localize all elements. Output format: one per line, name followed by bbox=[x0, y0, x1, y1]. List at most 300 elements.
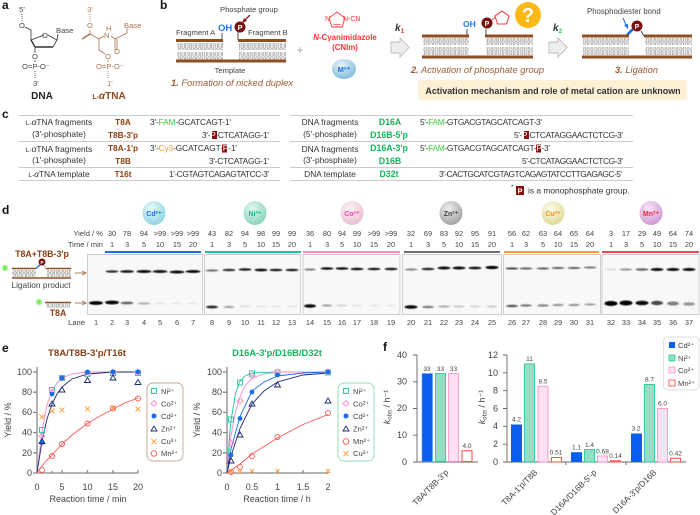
legend f: Cd²⁺ bbox=[678, 341, 694, 350]
bar chart: other ligations: 2 bbox=[493, 439, 498, 449]
yield row: 17 bbox=[622, 229, 630, 238]
k2 arrow: k bbox=[553, 23, 559, 34]
bar chart: other ligations: 0 bbox=[493, 457, 498, 467]
metal colour bars bbox=[105, 251, 699, 253]
label e: e bbox=[2, 341, 9, 355]
time row: 5 bbox=[541, 240, 545, 249]
time row: 10 bbox=[653, 240, 661, 249]
time row: 15 bbox=[370, 240, 378, 249]
time row: 5 bbox=[243, 240, 247, 249]
bar chart: other ligations: 8.7 bbox=[645, 376, 654, 384]
yield row: 98 bbox=[257, 229, 265, 238]
left table: L-aTNA sequences: (3'-phosphate) bbox=[32, 129, 86, 139]
DNA structure: 5' bbox=[19, 5, 25, 14]
right table: DNA sequences: (5'-phosphate) bbox=[303, 129, 357, 139]
L-aTNA structure: O=P-O⁻ bbox=[96, 62, 124, 71]
bar chart: other ligations: / h⁻¹ bbox=[477, 390, 487, 410]
ligation product schematic bbox=[2, 249, 71, 290]
chart: D16A-3'p/D16B/D32t: 40 bbox=[212, 428, 222, 438]
legend left: Cd²⁺ bbox=[161, 412, 177, 421]
step 1 nicked duplex bbox=[171, 5, 293, 88]
right table: DNA sequences: D16B bbox=[379, 156, 401, 166]
bar chart: other ligations bbox=[477, 350, 686, 515]
left table: L-aTNA sequences: T16t bbox=[114, 169, 132, 179]
yield row: 94 bbox=[241, 229, 249, 238]
ligation product schematic: T8A+T8B-3'p bbox=[15, 249, 69, 259]
yield row: 82 bbox=[225, 229, 233, 238]
lane numbers: 9 bbox=[227, 318, 231, 327]
legend right: Cd²⁺ bbox=[353, 412, 369, 421]
footnote: P bbox=[517, 186, 523, 196]
L-aTNA structure: O bbox=[87, 21, 93, 30]
legend right: Ni²⁺ bbox=[353, 387, 367, 396]
step 1 nicked duplex: Template bbox=[215, 66, 245, 75]
arrow to T8A band bbox=[75, 301, 86, 305]
bar chart: other ligations: 0.51 bbox=[550, 450, 563, 456]
right table: DNA sequences: DNA template bbox=[304, 169, 356, 179]
right table: DNA sequences: D16A bbox=[379, 117, 402, 127]
time row: 3 bbox=[624, 240, 628, 249]
panel a: structures bbox=[2, 0, 141, 102]
legend f: Co²⁺ bbox=[678, 366, 694, 375]
chart: T8A/T8B-3'p/T16t: 10 bbox=[82, 482, 93, 492]
lane numbers: 26 bbox=[508, 318, 516, 327]
bar chart: other ligations: 0.68 bbox=[596, 448, 609, 456]
chart: T8A/T8B-3'p/T16t: Reaction time / min bbox=[49, 494, 127, 504]
chart: D16A-3'p/D16B/D32t: 2 bbox=[325, 482, 331, 492]
lane numbers: 33 bbox=[622, 318, 630, 327]
lane numbers: 11 bbox=[257, 318, 265, 327]
yield row: >99 bbox=[171, 229, 183, 238]
bar chart: T8A/T8B-3'p: T8A/T8B-3'p bbox=[410, 467, 451, 507]
chart: T8A/T8B-3'p/T16t: 15 bbox=[108, 482, 118, 492]
step 1 nicked duplex: P bbox=[237, 23, 243, 32]
time row: 15 bbox=[173, 240, 181, 249]
bar chart: other ligations: 8.5 bbox=[538, 378, 548, 386]
lane numbers: 34 bbox=[638, 318, 646, 327]
yield row: 29 bbox=[638, 229, 646, 238]
lane numbers: 10 bbox=[241, 318, 249, 327]
lane numbers: 31 bbox=[586, 318, 594, 327]
left table: L-aTNA sequences: T8B-3'p bbox=[108, 130, 138, 140]
right table: DNA sequences: D32t bbox=[379, 169, 399, 179]
lane numbers: 30 bbox=[570, 318, 578, 327]
right table: DNA sequences: DNA fragments bbox=[302, 117, 358, 127]
lane numbers: 13 bbox=[288, 318, 296, 327]
DNA structure: O bbox=[19, 21, 25, 30]
time row bbox=[68, 240, 693, 249]
step 1 nicked duplex: Phosphate group bbox=[220, 5, 278, 14]
legend f bbox=[664, 337, 699, 390]
yield row: 64 bbox=[554, 229, 562, 238]
time row: 20 bbox=[288, 240, 296, 249]
left table: L-aTNA sequences: 3'-P-CTCATAGG-1' bbox=[202, 130, 269, 140]
chart: D16A-3'p/D16B/D32t: 0 bbox=[224, 482, 230, 492]
time row: 1 bbox=[510, 240, 514, 249]
legend right: Cu²⁺ bbox=[353, 449, 369, 458]
lane numbers: 14 bbox=[306, 318, 314, 327]
time row: 5 bbox=[442, 240, 446, 249]
label d: d bbox=[2, 203, 9, 217]
bar chart: other ligations: 4.2 bbox=[512, 416, 521, 424]
lane numbers: 18 bbox=[370, 318, 378, 327]
L-aTNA structure: 3' bbox=[87, 5, 93, 14]
DNA structure: O bbox=[32, 52, 38, 61]
DNA structure: O bbox=[42, 31, 48, 40]
yield row: 43 bbox=[208, 229, 216, 238]
bar chart: other ligations: 8 bbox=[493, 386, 498, 396]
time row: 3 bbox=[125, 240, 129, 249]
step 3 ligation bbox=[582, 7, 692, 75]
footnote: is a monophosphate group. bbox=[528, 186, 630, 196]
metal cation spheres: Co²⁺ bbox=[344, 211, 360, 218]
yield row: 92 bbox=[455, 229, 463, 238]
yield row: 99 bbox=[353, 229, 361, 238]
time row: 15 bbox=[669, 240, 677, 249]
right table: DNA sequences: 5'-FAM-GTGACGTAGCATCAGT-3' bbox=[420, 117, 542, 127]
time row: 20 bbox=[586, 240, 594, 249]
lane numbers: Lane bbox=[68, 318, 85, 327]
bar chart: other ligations: 10 bbox=[488, 368, 498, 378]
chart: D16A-3'p/D16B/D32t: 1.5 bbox=[297, 482, 309, 492]
lane numbers: 4 bbox=[142, 318, 146, 327]
yield row: 69 bbox=[424, 229, 432, 238]
time row: 10 bbox=[353, 240, 361, 249]
bar chart: other ligations: obs bbox=[482, 410, 488, 420]
DNA structure: Base bbox=[56, 26, 73, 35]
left table: L-aTNA sequences: L-αTNA template bbox=[28, 169, 90, 179]
time row: 10 bbox=[554, 240, 562, 249]
lane numbers: 6 bbox=[175, 318, 179, 327]
bar chart: T8A/T8B-3'p: 30 bbox=[397, 376, 407, 386]
panel c: sequence table bbox=[2, 107, 633, 196]
yield row: 83 bbox=[440, 229, 448, 238]
chart: D16A-3'p/D16B/D32t: 0 bbox=[217, 468, 222, 478]
chart: T8A/T8B-3'p/T16t: 80 bbox=[22, 387, 32, 397]
lane numbers: 5 bbox=[158, 318, 162, 327]
DNA structure bbox=[19, 5, 73, 102]
label c: c bbox=[2, 107, 9, 121]
chart: D16A-3'p/D16B/D32t: Reaction time / h bbox=[243, 494, 311, 504]
yield row: 65 bbox=[570, 229, 578, 238]
time row: 5 bbox=[142, 240, 146, 249]
yield row: 64 bbox=[669, 229, 677, 238]
step 2 activation: OH bbox=[463, 19, 476, 29]
time row: 1 bbox=[409, 240, 413, 249]
lane numbers: 8 bbox=[210, 318, 214, 327]
bar chart: other ligations: 1.1 bbox=[572, 444, 581, 452]
left table: L-aTNA sequences: 3'-CTCATAGG-1' bbox=[209, 156, 269, 166]
bar chart: other ligations: 0.42 bbox=[669, 450, 682, 458]
bar chart: T8A/T8B-3'p: k bbox=[382, 419, 392, 424]
lane numbers: 7 bbox=[191, 318, 195, 327]
bar chart: other ligations: 4 bbox=[493, 421, 498, 431]
bar chart: T8A/T8B-3'p: 4.0 bbox=[462, 443, 472, 450]
step 3 ligation: 3. Ligation bbox=[615, 65, 658, 75]
metal cation spheres: Cd²⁺ bbox=[146, 211, 162, 218]
yield row: 99 bbox=[272, 229, 280, 238]
T8A schematic bbox=[36, 299, 71, 318]
left table: L-aTNA sequences: 3'-Cy3-GCATCAGT-P-1' bbox=[150, 143, 237, 153]
yield row: 36 bbox=[306, 229, 314, 238]
left table: L-aTNA sequences: 1'-CGTAGTCAGAGTATCC-3' bbox=[169, 169, 269, 179]
chart: T8A/T8B-3'p/T16t: 20 bbox=[133, 482, 143, 492]
bar chart: T8A/T8B-3'p: 33 bbox=[423, 366, 431, 373]
chart: T8A/T8B-3'p/T16t: Yield / % bbox=[3, 402, 13, 438]
bar chart: T8A/T8B-3'p: 0 bbox=[402, 457, 407, 467]
step 3 ligation: P bbox=[635, 24, 640, 31]
yield row: 49 bbox=[653, 229, 661, 238]
lane numbers: 17 bbox=[353, 318, 361, 327]
chart: T8A/T8B-3'p/T16t: 5 bbox=[59, 482, 65, 492]
chart: T8A/T8B-3'p/T16t: 100 bbox=[17, 367, 32, 377]
legend left: Ni²⁺ bbox=[161, 387, 175, 396]
yield row: 95 bbox=[471, 229, 479, 238]
panel f: rate constants bbox=[382, 337, 699, 515]
yield row: 78 bbox=[123, 229, 131, 238]
yield row: 74 bbox=[685, 229, 693, 238]
bar chart: T8A/T8B-3'p bbox=[382, 350, 478, 507]
time row: 3 bbox=[227, 240, 231, 249]
chart: D16A-3'p/D16B/D32t: 20 bbox=[212, 448, 222, 458]
right table: DNA sequences bbox=[302, 117, 623, 179]
yield row: Yield / % bbox=[73, 229, 103, 238]
legend f: Mn²⁺ bbox=[678, 379, 695, 388]
yield row: 32 bbox=[407, 229, 415, 238]
time row: 10 bbox=[257, 240, 265, 249]
lane numbers: 2 bbox=[110, 318, 114, 327]
left table: L-aTNA sequences: 3'-FAM-GCATCAGT-1' bbox=[150, 117, 231, 127]
left table: L-aTNA sequences bbox=[26, 117, 269, 179]
metal cation sphere: M²⁺ bbox=[338, 65, 350, 74]
metal cation spheres: Mn²⁺ bbox=[643, 211, 659, 218]
ligation product schematic: Ligation product bbox=[11, 280, 71, 290]
k2 arrow: 2 bbox=[559, 28, 563, 35]
yield row: >99 bbox=[154, 229, 166, 238]
bar chart: T8A/T8B-3'p: 40 bbox=[397, 350, 407, 360]
L-aTNA structure: H bbox=[106, 24, 111, 33]
lane numbers: 35 bbox=[653, 318, 661, 327]
L-aTNA structure: N bbox=[104, 31, 109, 40]
lane numbers: 25 bbox=[488, 318, 496, 327]
L-aTNA structure: O bbox=[105, 52, 111, 61]
step 1 nicked duplex: OH bbox=[218, 23, 232, 34]
time row: 20 bbox=[387, 240, 395, 249]
yield row: 30 bbox=[108, 229, 116, 238]
left table: L-aTNA sequences: (1'-phosphate) bbox=[32, 155, 86, 165]
lane numbers: 1 bbox=[94, 318, 98, 327]
legend right bbox=[338, 383, 374, 461]
yield row: 94 bbox=[338, 229, 346, 238]
yield row: >99 bbox=[187, 229, 199, 238]
time row: 5 bbox=[640, 240, 644, 249]
bar chart: T8A/T8B-3'p: 10 bbox=[397, 430, 407, 440]
L-aTNA structure: Base bbox=[124, 21, 141, 30]
bar chart: other ligations: 3.2 bbox=[631, 426, 641, 432]
legend left bbox=[147, 383, 183, 461]
right table: DNA sequences: D16A-3'p bbox=[370, 143, 409, 153]
yield row: 94 bbox=[140, 229, 148, 238]
bar chart: other ligations: T8A-1'p/T8B bbox=[499, 467, 540, 507]
ligation product schematic: P bbox=[40, 260, 44, 265]
step 2 activation: P bbox=[485, 21, 490, 28]
label f: f bbox=[383, 340, 388, 354]
bar chart: T8A/T8B-3'p: 33 bbox=[437, 366, 444, 373]
time row: 20 bbox=[488, 240, 496, 249]
left table: L-aTNA sequences: L-αTNA fragments bbox=[26, 117, 92, 127]
chart: T8A/T8B-3'p/T16t bbox=[3, 348, 143, 504]
lane numbers: 24 bbox=[471, 318, 479, 327]
left table: L-aTNA sequences: T8A-1'p bbox=[108, 143, 138, 153]
chart: D16A-3'p/D16B/D32t: 60 bbox=[212, 407, 222, 417]
legend f: Ni²⁺ bbox=[678, 354, 692, 363]
legend left: Co²⁺ bbox=[161, 400, 177, 408]
legend right: Co²⁺ bbox=[353, 400, 369, 408]
time row: 20 bbox=[685, 240, 693, 249]
lane numbers: 36 bbox=[669, 318, 677, 327]
step 2 activation bbox=[410, 2, 544, 75]
time row: 20 bbox=[189, 240, 197, 249]
lane numbers: 29 bbox=[554, 318, 562, 327]
bar chart: other ligations: k bbox=[477, 419, 487, 424]
right table: DNA sequences: 5'-CTCATAGGAACTCTCG-3' bbox=[522, 156, 623, 166]
yield row: >99 bbox=[368, 229, 380, 238]
bar chart: other ligations: D16A-3'p/D16B bbox=[610, 467, 659, 515]
legend left: Mn²⁺ bbox=[161, 449, 178, 458]
time row: 1 bbox=[609, 240, 613, 249]
L-aTNA structure: O bbox=[114, 47, 120, 56]
yield row: 80 bbox=[323, 229, 331, 238]
yield row: 99 bbox=[288, 229, 296, 238]
k1 arrow: k bbox=[395, 23, 401, 34]
gel bands bbox=[89, 266, 696, 309]
gel frames bbox=[88, 254, 699, 314]
lane numbers: 21 bbox=[424, 318, 432, 327]
time row: 3 bbox=[524, 240, 528, 249]
L-aTNA structure: 1' bbox=[107, 79, 113, 88]
plus sign: + bbox=[296, 43, 304, 57]
bar chart: other ligations: 11 bbox=[526, 356, 533, 363]
L-aTNA structure bbox=[82, 5, 141, 102]
right table: DNA sequences: (3'-phosphate) bbox=[303, 155, 357, 165]
arrow to ligation product band bbox=[75, 271, 86, 275]
chart: T8A/T8B-3'p/T16t: 0 bbox=[34, 482, 40, 492]
legend right: Mn²⁺ bbox=[353, 437, 370, 446]
CNIm reagent: (CNIm) bbox=[332, 43, 358, 52]
k1 arrow: 1 bbox=[401, 28, 405, 35]
lane numbers: 22 bbox=[440, 318, 448, 327]
time row: 1 bbox=[110, 240, 114, 249]
step 1 nicked duplex: Fragment B bbox=[248, 28, 288, 37]
legend left: Zn²⁺ bbox=[161, 424, 176, 434]
metal cation spheres: Zn²⁺ bbox=[444, 211, 459, 218]
yield row: 62 bbox=[522, 229, 530, 238]
CNIm reagent bbox=[313, 12, 377, 52]
time row: 5 bbox=[340, 240, 344, 249]
left table: L-aTNA sequences: T8A bbox=[115, 117, 131, 127]
DNA structure: DNA bbox=[31, 91, 53, 102]
metal cation spheres: Cu²⁺ bbox=[545, 211, 561, 218]
time row: 3 bbox=[325, 240, 329, 249]
right table: DNA sequences: 3'-CACTGCATCGTAGTCAGAGTATCCTTGAGAGC-5' bbox=[439, 169, 622, 179]
bar chart: other ligations: 1.4 bbox=[585, 442, 594, 449]
yield row: 91 bbox=[488, 229, 496, 238]
CNIm reagent: N bbox=[325, 16, 330, 23]
yield row: 56 bbox=[508, 229, 516, 238]
bar chart: T8A/T8B-3'p: obs bbox=[388, 410, 394, 420]
CNIm reagent: N-Cyanimidazole bbox=[313, 33, 377, 42]
lane numbers: 16 bbox=[338, 318, 346, 327]
L-aTNA structure: L-αTNA bbox=[92, 91, 126, 102]
lane numbers bbox=[68, 318, 693, 327]
panel e: yield kinetics bbox=[2, 341, 374, 504]
bar chart: other ligations: 6.0 bbox=[658, 400, 667, 408]
lane numbers: 3 bbox=[125, 318, 129, 327]
yield row: 63 bbox=[539, 229, 547, 238]
lane numbers: 32 bbox=[607, 318, 615, 327]
k1 arrow bbox=[391, 23, 409, 57]
time row: 15 bbox=[570, 240, 578, 249]
lane numbers: 15 bbox=[323, 318, 331, 327]
legend right: Zn²⁺ bbox=[353, 424, 368, 434]
DNA structure: O=P-O⁻ bbox=[22, 62, 50, 71]
chart: D16A-3'p/D16B/D32t: D16A-3'p/D16B/D32t bbox=[232, 347, 322, 358]
left table: L-aTNA sequences: L-αTNA fragments bbox=[26, 144, 92, 154]
step 1 nicked duplex: Fragment A bbox=[176, 28, 216, 37]
lane numbers: 20 bbox=[407, 318, 415, 327]
yield row bbox=[73, 229, 693, 238]
chart: D16A-3'p/D16B/D32t: 0.5 bbox=[246, 482, 258, 492]
bar chart: T8A/T8B-3'p: / h⁻¹ bbox=[382, 390, 392, 410]
bar chart: other ligations: 0.14 bbox=[609, 453, 622, 460]
metal cation spheres: Ni²⁺ bbox=[248, 211, 262, 218]
bar chart: other ligations: 6 bbox=[493, 404, 498, 414]
chart: D16A-3'p/D16B/D32t: Yield / % bbox=[192, 402, 202, 438]
panel d: gel electrophoresis bbox=[2, 201, 699, 327]
panel b: ligation mechanism bbox=[160, 0, 692, 100]
callout: unknown mechanism: Activation mechanism and role of metal cation are unknown bbox=[425, 86, 681, 96]
lane numbers: 19 bbox=[387, 318, 395, 327]
right table: DNA sequences: D16B-5'p bbox=[370, 130, 409, 140]
right table: DNA sequences: DNA fragments bbox=[302, 144, 358, 154]
time row: 15 bbox=[272, 240, 280, 249]
chart: T8A/T8B-3'p/T16t: 40 bbox=[22, 428, 32, 438]
time row: 10 bbox=[156, 240, 164, 249]
lane numbers: 12 bbox=[272, 318, 280, 327]
left table: L-aTNA sequences: T8B bbox=[115, 156, 131, 166]
time row: Time / min bbox=[68, 240, 103, 249]
legend left: Cu²⁺ bbox=[161, 437, 177, 446]
lane numbers: 28 bbox=[539, 318, 547, 327]
metal cation spheres bbox=[142, 201, 662, 225]
lane numbers: 37 bbox=[685, 318, 693, 327]
right table: DNA sequences: 5'-P-CTCATAGGAACTCTCG-3' bbox=[514, 130, 623, 140]
time row: 1 bbox=[210, 240, 214, 249]
step 2 activation: ? bbox=[522, 5, 534, 27]
T8A schematic: T8A bbox=[50, 308, 67, 318]
bar chart: T8A/T8B-3'p: 33 bbox=[450, 366, 457, 373]
time row: 15 bbox=[471, 240, 479, 249]
bar chart: other ligations: 12 bbox=[488, 350, 498, 360]
metal cation sphere bbox=[332, 59, 356, 79]
chart: D16A-3'p/D16B/D32t: 80 bbox=[212, 387, 222, 397]
time row: 3 bbox=[426, 240, 430, 249]
table rules bbox=[19, 116, 633, 180]
yield row: 3 bbox=[609, 229, 613, 238]
lane numbers: 23 bbox=[455, 318, 463, 327]
step 2 activation: 2. Activation of phosphate group bbox=[410, 65, 544, 75]
yield row: 64 bbox=[586, 229, 594, 238]
